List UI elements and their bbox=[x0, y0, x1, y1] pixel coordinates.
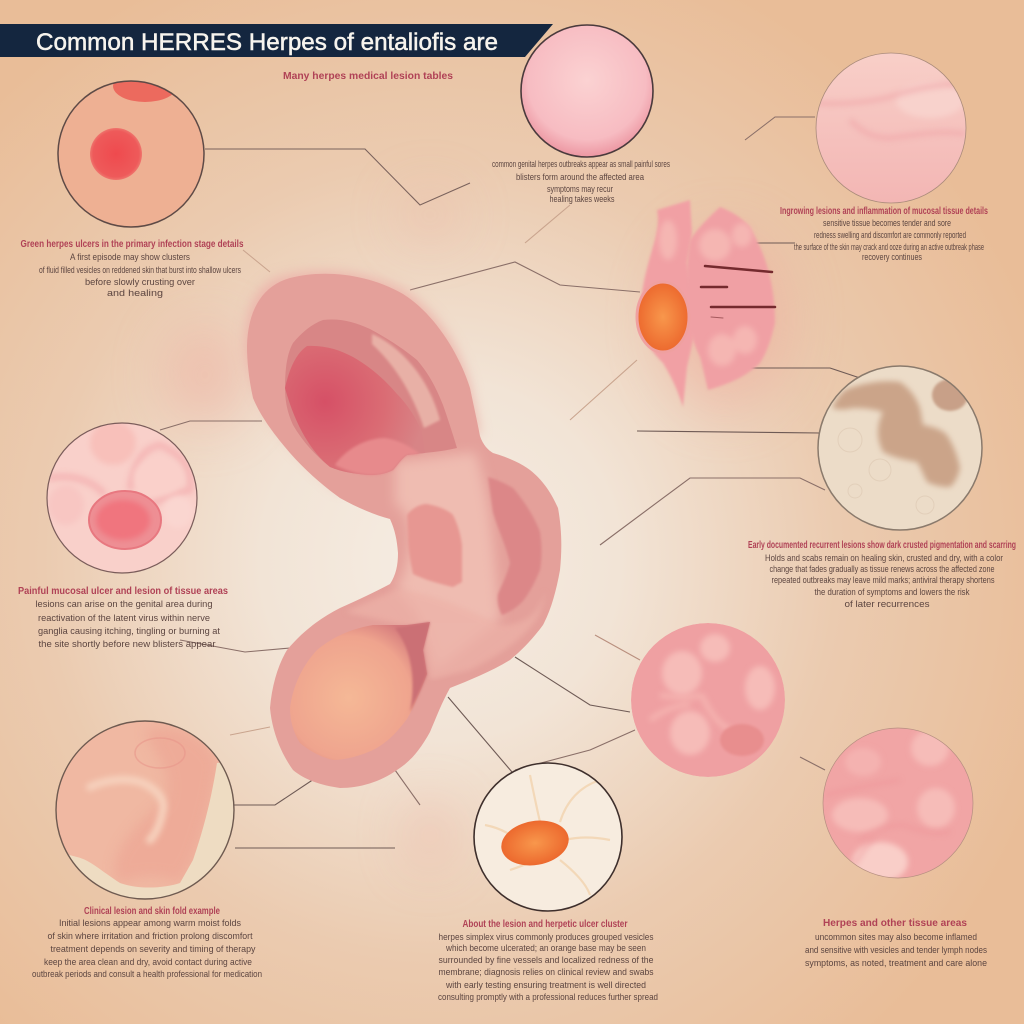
subtitle: Many herpes medical lesion tables bbox=[283, 71, 453, 82]
blisters bbox=[662, 634, 775, 755]
title text: Common HERRES Herpes of entaliofis are bbox=[36, 29, 498, 56]
circle outline: skin fold bbox=[56, 721, 234, 899]
text block: upper left: and healing bbox=[107, 288, 163, 299]
text block: bottom left: keep the area clean and dry, avoid contact during active bbox=[44, 957, 252, 968]
central organ illustration bbox=[245, 271, 561, 788]
text block: middle left: ganglia causing itching, tingling or burning at bbox=[38, 626, 220, 637]
lighter tissue lobes bbox=[659, 220, 757, 366]
circle: pink ball bbox=[521, 25, 653, 157]
dark tip of lower sac bbox=[395, 622, 430, 712]
text block: bottom left: Initial lesions appear among warm moist folds bbox=[59, 918, 241, 929]
right pocket bbox=[488, 477, 542, 615]
pink bands bbox=[48, 445, 191, 505]
red spot bbox=[90, 128, 142, 180]
circle: pink blisters bbox=[631, 623, 785, 777]
small organ with orange lesion bbox=[637, 200, 775, 407]
text block: middle left bbox=[18, 586, 228, 650]
text block: bottom centre: membrane; diagnosis relies on clinical review and swabs bbox=[438, 967, 654, 978]
text block: bottom centre: consulting promptly with a professional reduces further spread bbox=[438, 992, 658, 1003]
text block: upper left: Green herpes ulcers in the primary infection stage details bbox=[20, 239, 244, 250]
text block: bottom centre: with early testing ensuring treatment is well directed bbox=[445, 980, 646, 991]
dark marks bbox=[701, 266, 775, 318]
text block: upper left: of fluid filled vesicles on reddened skin that burst into shallow ulcers bbox=[39, 265, 241, 276]
circle: beige brown patch bbox=[818, 366, 982, 530]
circle outline: orange lesion bbox=[474, 763, 622, 911]
circle: skin fold bottom left bbox=[56, 722, 233, 898]
brown patch bbox=[832, 381, 960, 487]
lower sac bbox=[290, 622, 430, 760]
text block: bottom right: uncommon sites may also become inflamed bbox=[815, 932, 977, 943]
text block: bottom centre: which become ulcerated; an orange base may be seen bbox=[445, 943, 646, 954]
text block: top centre: healing takes weeks bbox=[550, 194, 615, 205]
text block: middle right bbox=[748, 540, 1016, 610]
text block: bottom centre: herpes simplex virus commonly produces grouped vesicles bbox=[438, 932, 654, 943]
text block: middle left: Painful mucosal ulcer and lesion of tissue areas bbox=[18, 586, 228, 597]
text block: bottom centre: surrounded by fine vessels and localized redness of the bbox=[438, 955, 654, 966]
text block: upper left: before slowly crusting over bbox=[85, 277, 195, 288]
vein loop bbox=[135, 738, 185, 768]
light patch bbox=[898, 90, 961, 117]
circle: orange lesion with veins bbox=[474, 763, 622, 911]
text block: top centre bbox=[492, 159, 670, 205]
pale wedge in cavity bbox=[372, 334, 440, 428]
darker pink side bbox=[115, 728, 217, 883]
circle outline: beige patch bbox=[818, 366, 982, 530]
circle outline: pink tissue bottom right bbox=[823, 728, 973, 878]
upper cavity rim bbox=[285, 319, 457, 475]
text block: bottom right bbox=[805, 918, 987, 969]
circle: pink tissue top right bbox=[816, 53, 966, 203]
soft pink glow behind organs bbox=[165, 189, 790, 867]
text block: bottom right: symptoms, as noted, treatment and care alone bbox=[805, 958, 987, 969]
circle: pink tissue bottom right bbox=[823, 728, 973, 882]
text block: bottom left: outbreak periods and consult a health professional for medication bbox=[32, 969, 262, 980]
organ body bbox=[247, 274, 561, 788]
text block: middle left: lesions can arise on the genital area during bbox=[36, 599, 212, 610]
skin texture bbox=[838, 428, 934, 514]
text block: bottom left: Clinical lesion and skin fold example bbox=[84, 906, 220, 917]
circle outline: red sore bbox=[58, 81, 204, 227]
upper cavity red interior bbox=[285, 346, 425, 475]
circle outline: pink tissue bbox=[816, 53, 966, 203]
middle pocket bbox=[407, 504, 462, 587]
leader lines bbox=[160, 117, 860, 848]
text block: bottom left: treatment depends on severity and timing of therapy bbox=[50, 944, 256, 955]
title banner bbox=[0, 24, 553, 57]
skin fold highlight bbox=[90, 780, 163, 840]
orange lesion bbox=[637, 282, 689, 352]
orange lesion bbox=[501, 820, 569, 866]
text block: bottom left: of skin where irritation and friction prolong discomfort bbox=[48, 931, 253, 942]
brown patch top right bbox=[932, 379, 968, 411]
circle: pink lesion left bbox=[47, 421, 197, 573]
text block: bottom right: Herpes and other tissue areas bbox=[823, 918, 967, 929]
text block: top centre: common genital herpes outbreaks appear as small painful sores bbox=[492, 159, 670, 170]
top red patch bbox=[113, 82, 172, 102]
veins bbox=[485, 775, 610, 895]
web lines bbox=[650, 695, 730, 730]
circle outline: pink lesion left bbox=[47, 423, 197, 573]
text block: bottom centre: About the lesion and herpetic ulcer cluster bbox=[462, 919, 628, 930]
tissue lobes bbox=[51, 424, 182, 522]
text block: top centre: symptoms may recur bbox=[547, 184, 613, 195]
band above the lower sac bbox=[354, 594, 536, 677]
text block: bottom centre bbox=[438, 919, 658, 1003]
web lines bbox=[854, 842, 872, 864]
central lesion bbox=[89, 491, 161, 549]
text block: middle right: the duration of symptoms and lowers the risk bbox=[814, 587, 970, 598]
text block: top right: recovery continues bbox=[862, 252, 922, 263]
text block: upper left bbox=[20, 239, 244, 299]
circle: red sore on skin bbox=[58, 70, 204, 227]
text block: bottom left bbox=[32, 906, 262, 980]
left lobe bbox=[640, 200, 697, 407]
text block: middle right: of later recurrences bbox=[844, 599, 930, 610]
cream lower area bbox=[69, 762, 234, 898]
text block: upper left: A first episode may show clusters bbox=[70, 252, 190, 263]
text block: top right: sensitive tissue becomes tender and sore bbox=[823, 218, 951, 229]
text block: middle left: the site shortly before new blisters appear bbox=[38, 639, 216, 650]
right lobe bbox=[687, 207, 775, 390]
light tissue bands bbox=[345, 452, 545, 680]
blisters bbox=[832, 730, 955, 882]
band between the pockets bbox=[392, 450, 502, 624]
organ soft top edge bbox=[245, 271, 480, 490]
tissue folds bbox=[816, 84, 965, 138]
text block: bottom right: and sensitive with vesicles and tender lymph nodes bbox=[805, 945, 987, 956]
nodular tissue in cavity bbox=[335, 438, 420, 475]
text block: middle left: reactivation of the latent virus within nerve bbox=[38, 613, 210, 624]
dark patch bbox=[720, 724, 764, 756]
text block: top centre: blisters form around the affected area bbox=[516, 172, 645, 183]
text block: top right bbox=[780, 206, 988, 263]
